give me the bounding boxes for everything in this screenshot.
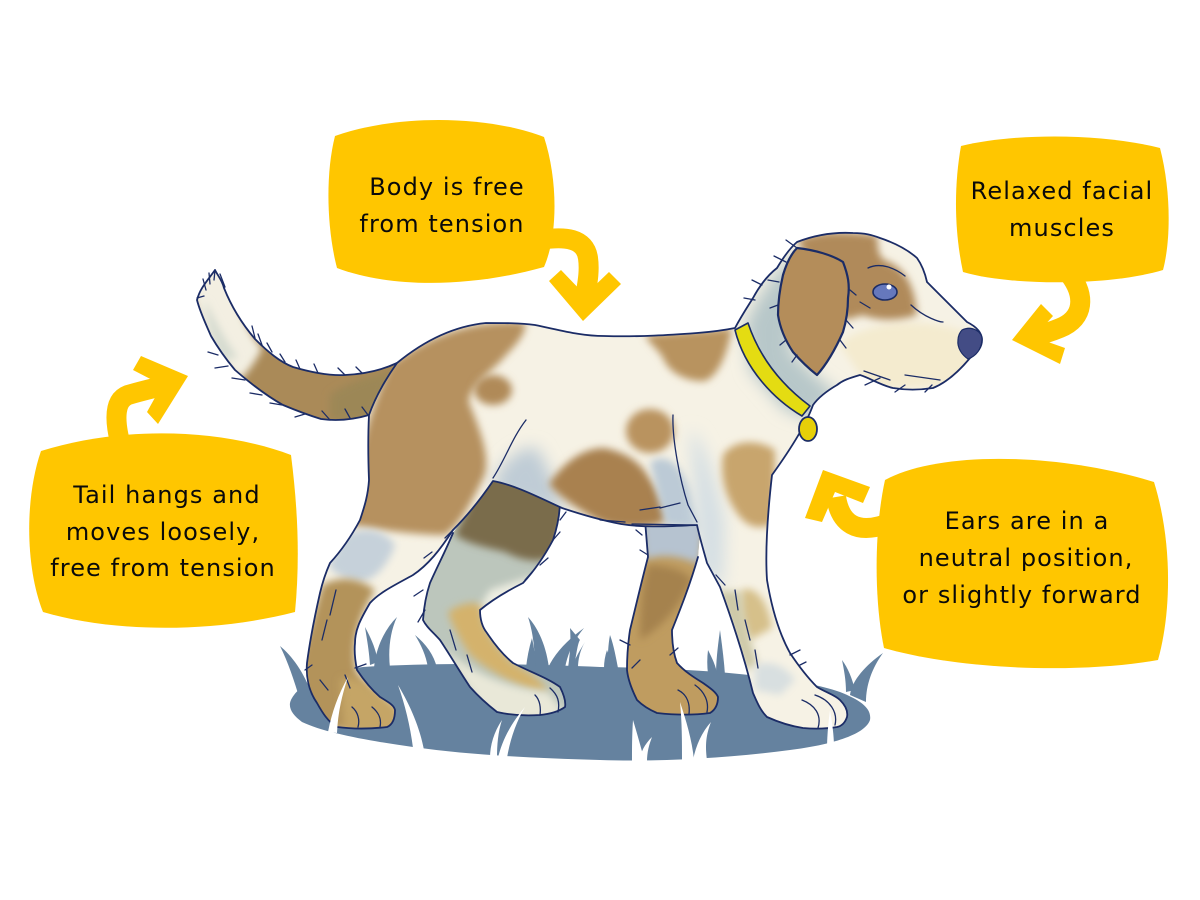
collar — [735, 323, 810, 416]
callout: tail — [29, 356, 298, 628]
text: tail — [50, 481, 276, 582]
far front leg — [627, 515, 718, 714]
body outline — [307, 233, 982, 729]
arrow: face — [1012, 275, 1080, 364]
far hind leg — [423, 470, 570, 720]
callout: ears — [805, 459, 1168, 668]
text: tail: free from tension — [50, 554, 276, 582]
speech box: face — [956, 136, 1169, 282]
text: face: muscles — [1009, 214, 1115, 242]
dog body, neck, head and near legs — [300, 232, 985, 735]
callout: face — [956, 136, 1169, 364]
speech box: body — [328, 120, 554, 283]
text: ears: Ears are in a — [945, 507, 1109, 535]
text: body: from tension — [359, 210, 525, 238]
tail fur tufts — [197, 270, 368, 420]
text: ears: or slightly forward — [902, 581, 1142, 609]
nose — [958, 328, 982, 359]
speech box: ears — [877, 459, 1168, 668]
text: ears — [902, 507, 1142, 609]
illustration: dog on grass — [190, 232, 985, 762]
coat patches — [300, 232, 985, 735]
arrow: body — [540, 238, 621, 321]
head mask — [797, 232, 917, 320]
ear — [744, 240, 856, 375]
arrow: tail — [116, 356, 188, 442]
speech box: tail — [29, 433, 298, 628]
text: ears: neutral position, — [919, 544, 1133, 572]
callout: body — [328, 120, 621, 321]
face and coat lines — [305, 266, 943, 728]
ground shadow — [290, 664, 870, 761]
text: body: Body is free — [369, 173, 525, 201]
text: face — [971, 177, 1153, 242]
front grass — [328, 677, 834, 762]
neck shading — [745, 250, 838, 420]
text: tail: moves loosely, — [66, 518, 260, 546]
collar tag — [799, 417, 817, 441]
text: tail: Tail hangs and — [72, 481, 261, 509]
eye — [873, 284, 897, 300]
text: face: Relaxed facial — [971, 177, 1153, 205]
ear fur — [744, 240, 856, 362]
back grass — [280, 617, 883, 702]
tail — [190, 265, 397, 420]
arrow: ears — [805, 470, 892, 528]
text: body — [359, 173, 525, 238]
